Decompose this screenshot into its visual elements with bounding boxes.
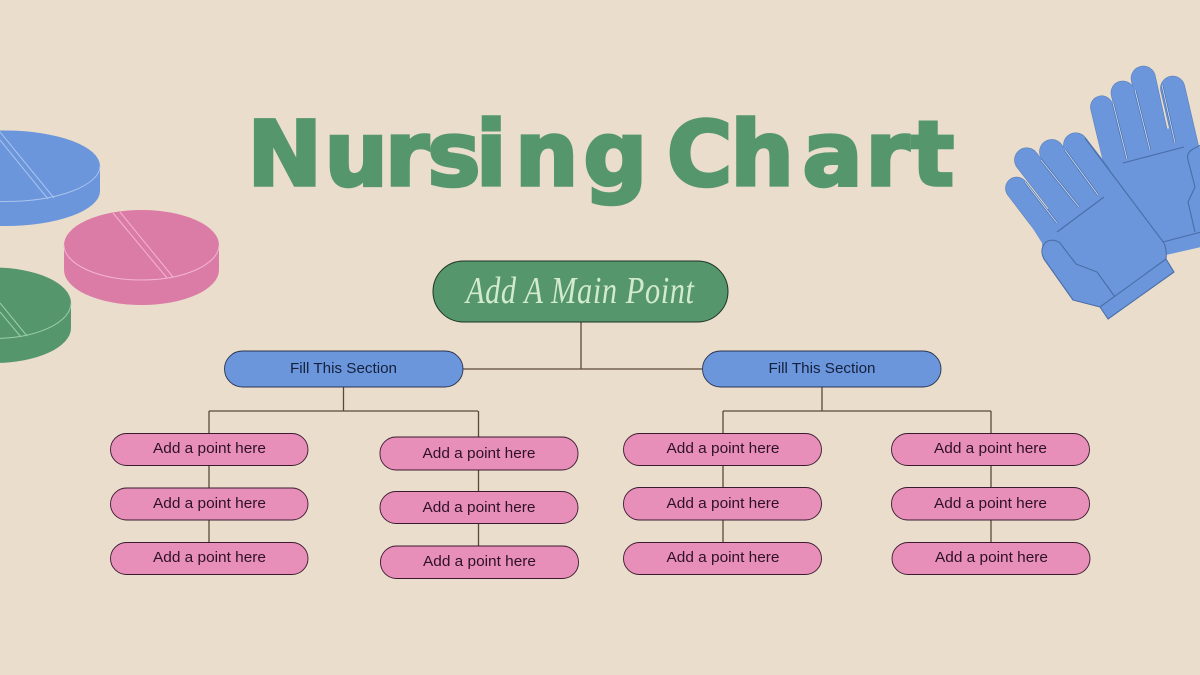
icon: pink pill [64, 210, 219, 305]
point column 4 [892, 434, 1090, 574]
point column 1: Add a point here [153, 440, 266, 457]
point column 2: Add a point here [422, 499, 536, 516]
point column 3: Add a point here [666, 495, 780, 512]
point column 2: Add a point here [422, 445, 536, 462]
main point box: Add A Main Point [464, 270, 695, 312]
icon: green pill [0, 268, 71, 363]
point column 4: Add a point here [934, 440, 1047, 457]
section box: left [224, 351, 463, 387]
back glove [1098, 78, 1200, 255]
point column 3: Add a point here [666, 440, 780, 457]
point column 1 [110, 434, 308, 574]
point column 4: Add a point here [935, 549, 1048, 566]
main point box [433, 261, 728, 322]
point column 1: Add a point here [153, 549, 266, 566]
point column 2 [380, 437, 578, 578]
section box: right [702, 351, 941, 387]
icon: gloves [1017, 78, 1200, 319]
front glove [1017, 138, 1174, 319]
connector lines [209, 322, 991, 547]
point column 2: Add a point here [423, 553, 536, 570]
point column 3: Add a point here [666, 549, 780, 566]
point column 4: Add a point here [934, 495, 1047, 512]
title: Nursing Chart [248, 102, 954, 206]
point column 3 [624, 434, 822, 574]
point column 1: Add a point here [153, 495, 266, 512]
section box: left: Fill This Section [290, 360, 397, 377]
icon: blue pill [0, 130, 100, 226]
section box: right: Fill This Section [768, 360, 876, 377]
